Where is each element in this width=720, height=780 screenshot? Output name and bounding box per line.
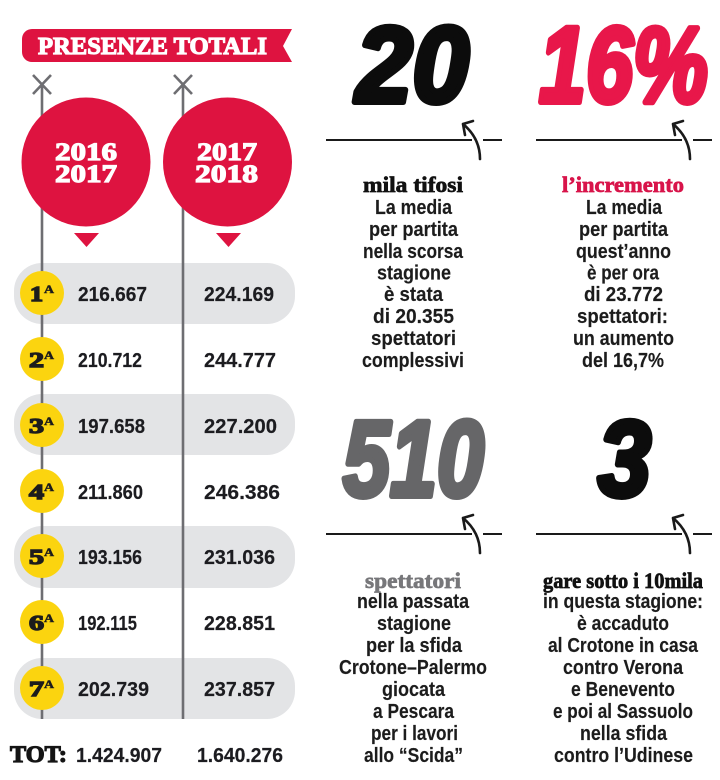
caption: gare sotto i 10mila <box>543 568 703 593</box>
matchday 1 row: 224.169 <box>204 284 274 306</box>
matchday 5 row: 193.156 <box>78 547 142 569</box>
caption: di 23.772 <box>584 284 663 306</box>
caption: in questa stagione: <box>543 591 703 613</box>
caption: di 20.355 <box>373 306 454 328</box>
totals row <box>10 742 283 767</box>
caption <box>362 172 464 372</box>
matchday 7 row: 237.857 <box>204 679 275 701</box>
matchday 3 row <box>20 403 277 447</box>
matchday 6 row: 228.851 <box>204 613 275 635</box>
panel: 20 mila tifosi <box>326 4 502 372</box>
divider arrow <box>536 121 712 159</box>
caption: complessivi <box>362 350 464 372</box>
matchday 4 row <box>20 469 280 513</box>
caption: per partita <box>369 219 459 241</box>
matchday 6 row: 6 <box>29 611 44 635</box>
caption <box>339 568 487 767</box>
matchday 5 row: 5 <box>29 545 44 569</box>
matchday 4 row: 4 <box>29 480 45 504</box>
caption <box>543 568 703 767</box>
season circle 2017/2018: 2018 <box>195 161 258 188</box>
matchday 1 row: 1 <box>30 282 43 306</box>
matchday 2 row: 2 <box>29 348 44 372</box>
divider arrow <box>326 515 502 553</box>
matchday 3 row: 197.658 <box>78 416 145 438</box>
matchday 7 row: A <box>44 677 54 691</box>
caption: nella sfida <box>580 723 668 745</box>
matchday 1 row: 216.667 <box>78 284 147 306</box>
totals row: TOT: <box>10 742 67 767</box>
caption: per partita <box>579 219 669 241</box>
caption: La media <box>375 197 453 219</box>
matchday 2 row: 244.777 <box>204 350 276 372</box>
matchday 7 row: 202.739 <box>78 679 149 701</box>
matchday 6 row: 192.115 <box>78 613 137 635</box>
caption: un aumento <box>573 328 674 350</box>
matchday 1 row <box>20 271 274 315</box>
season circle 2016/2017: 2017 <box>55 161 117 188</box>
matchday 1 row: A <box>44 282 54 296</box>
caption: al Crotone in casa <box>548 635 699 657</box>
caption: stagione <box>377 613 451 635</box>
matchday 5 row <box>20 534 275 578</box>
caption: è per ora <box>587 262 660 284</box>
season circle 2017/2018: 2017 <box>197 139 257 166</box>
matchday 2 row: A <box>44 348 54 362</box>
totals row: 1.640.276 <box>197 745 283 767</box>
big number 510: 510 <box>343 398 484 519</box>
row background pills <box>14 263 295 719</box>
caption: spettatori <box>371 328 456 350</box>
matchday 4 row: 211.860 <box>78 482 143 504</box>
caption: per i lavori <box>371 723 458 745</box>
caption <box>562 172 684 372</box>
caption: del 16,7% <box>582 350 664 372</box>
divider arrow <box>326 121 502 159</box>
caption: l’incremento <box>562 172 684 197</box>
caption: a Pescara <box>373 701 455 723</box>
matchday 3 row: A <box>44 414 54 428</box>
matchday 4 row: A <box>44 480 54 494</box>
matchday 3 row: 227.200 <box>204 416 277 438</box>
season circle 2016/2017 <box>22 98 150 247</box>
caption: spettatori: <box>577 306 668 328</box>
caption: contro l’Udinese <box>554 745 693 767</box>
panel: 510 spettatori <box>326 398 502 767</box>
matchday 7 row <box>20 666 275 710</box>
panel: presenze totali table <box>10 29 295 767</box>
caption: spettatori <box>365 568 461 593</box>
season circle 2016/2017: 2016 <box>55 139 117 166</box>
season axis lines with x marks <box>33 75 192 719</box>
matchday 6 row: A <box>44 611 54 625</box>
caption: nella passata <box>357 591 470 613</box>
divider arrow <box>536 515 712 553</box>
caption: stagione <box>377 262 451 284</box>
caption: allo “Scida” <box>364 745 463 767</box>
big number 20: 20 <box>354 4 469 125</box>
panel: 16% incremento <box>536 4 712 372</box>
matchday 5 row: A <box>44 545 54 559</box>
big number 3: 3 <box>598 398 651 519</box>
matchday 4 row: 246.386 <box>204 482 280 504</box>
title banner: PRESENZE TOTALI <box>38 34 267 60</box>
title banner <box>22 29 292 62</box>
panel: 3 gare sotto i 10mila <box>536 398 712 767</box>
caption: e Benevento <box>571 679 675 701</box>
caption: è accaduto <box>577 613 669 635</box>
caption: per la sfida <box>366 635 463 657</box>
matchday 7 row: 7 <box>29 677 44 701</box>
season circle 2017/2018 <box>163 98 292 247</box>
caption: nella scorsa <box>363 241 464 263</box>
caption: mila tifosi <box>363 172 463 197</box>
matchday 2 row: 210.712 <box>78 350 142 372</box>
matchday 5 row: 231.036 <box>204 547 275 569</box>
matchday 3 row: 3 <box>29 414 44 438</box>
caption: e poi al Sassuolo <box>553 701 693 723</box>
caption: La media <box>586 197 663 219</box>
caption: è stata <box>384 284 444 306</box>
caption: Crotone–Palermo <box>339 657 487 679</box>
totals row: 1.424.907 <box>76 745 162 767</box>
matchday 6 row <box>20 600 275 644</box>
caption: contro Verona <box>563 657 684 679</box>
caption: giocata <box>382 679 446 701</box>
caption: quest’anno <box>576 241 671 263</box>
matchday 2 row <box>20 337 276 381</box>
